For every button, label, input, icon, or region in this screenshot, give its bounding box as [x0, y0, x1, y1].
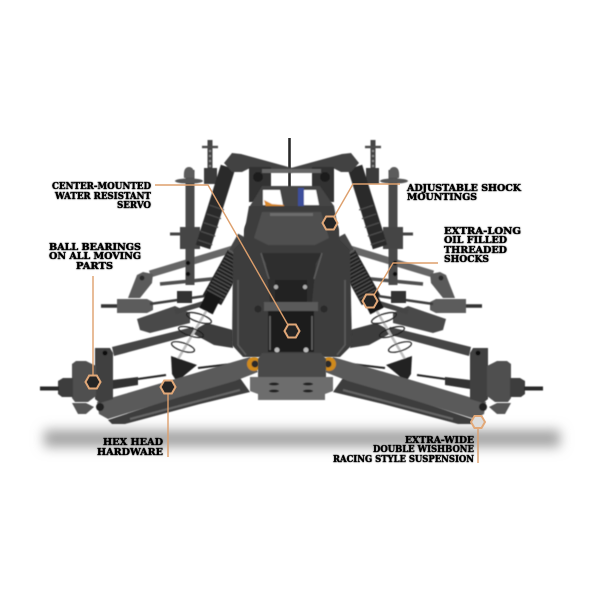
- label: suspension: RACING STYLE SUSPENSION: [333, 455, 474, 465]
- label: ball bearings: [49, 243, 141, 272]
- label: shocks: EXTRA-LONG: [444, 227, 521, 237]
- label: servo: [52, 182, 151, 211]
- label: hex head: HARDWARE: [97, 448, 163, 458]
- label: ball bearings: BALL BEARINGS: [49, 243, 141, 253]
- callout: extra-long shocks: [362, 227, 521, 308]
- label: shock mountings: ADJUSTABLE SHOCK: [406, 184, 522, 194]
- ground shadow: [44, 430, 560, 447]
- label: servo: SERVO: [117, 201, 151, 211]
- leader line: servo: [155, 185, 288, 325]
- label: servo: CENTER-MOUNTED: [52, 182, 151, 192]
- label: suspension: [333, 436, 474, 465]
- callout: ball bearings: [49, 243, 141, 388]
- leader line: shock mountings: [334, 184, 400, 217]
- label: ball bearings: ON ALL MOVING: [49, 252, 141, 262]
- hex marker: ball bearings: [86, 376, 100, 388]
- hex marker: shock mountings: [322, 216, 338, 230]
- callout: adjustable shock mountings: [322, 184, 522, 230]
- label: hex head: [97, 438, 163, 458]
- chassis: central tub: [232, 186, 352, 357]
- hex marker: servo: [284, 324, 300, 338]
- label: shocks: THREADED: [444, 246, 507, 256]
- chassis: left half suspension and shocks: [40, 140, 292, 424]
- label: ball bearings: PARTS: [76, 262, 113, 272]
- hex marker: hex head: [160, 380, 176, 394]
- label: hex head: HEX HEAD: [103, 438, 163, 448]
- leader line: hex head: [167, 393, 169, 457]
- hex marker: suspension: [471, 416, 485, 428]
- label: shocks: [444, 227, 521, 265]
- hex marker: shocks: [362, 294, 378, 308]
- label: shocks: SHOCKS: [444, 255, 489, 265]
- callout: center-mounted water resistant servo: [52, 182, 300, 338]
- leader line: shocks: [374, 263, 438, 295]
- callout: hex head hardware: [97, 380, 176, 458]
- skid plate: [250, 353, 333, 400]
- callout: extra-wide suspension: [333, 416, 485, 465]
- label: servo: WATER RESISTANT: [54, 192, 151, 202]
- chassis: antenna: [288, 138, 291, 208]
- leader line: ball bearings: [92, 276, 94, 376]
- leader line: suspension: [477, 428, 479, 463]
- label: shock mountings: [406, 184, 522, 203]
- label: shock mountings: MOUNTINGS: [407, 193, 477, 203]
- label: shocks: OIL FILLED: [444, 236, 507, 246]
- chassis: right half suspension and shocks: [291, 140, 543, 424]
- label: suspension: DOUBLE WISHBONE: [373, 445, 474, 455]
- label: suspension: EXTRA-WIDE: [405, 436, 474, 446]
